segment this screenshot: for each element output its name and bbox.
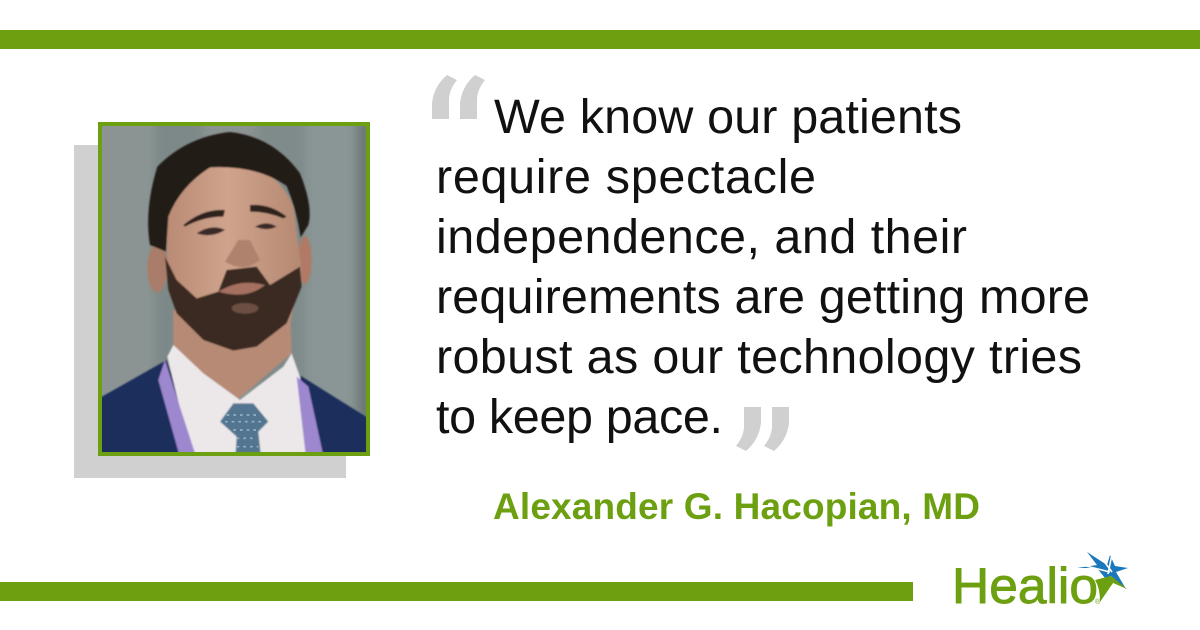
quote text: requirements are getting more — [436, 270, 1090, 324]
chin — [232, 303, 258, 314]
Healio logo — [952, 552, 1128, 614]
neck — [173, 310, 292, 400]
logo star — [1077, 552, 1128, 602]
logo wordmark: Healio — [952, 558, 1098, 614]
eyes — [197, 227, 225, 235]
tie — [220, 403, 268, 463]
closing quotation mark — [736, 407, 789, 451]
opening quotation mark — [432, 75, 485, 119]
registered mark: ® — [1095, 598, 1101, 606]
nose shadow — [225, 240, 260, 267]
lips — [218, 283, 265, 295]
quote text: independence, and their — [436, 210, 967, 264]
photo drop shadow panel — [74, 145, 346, 478]
quote text: robust as our technology tries — [436, 330, 1082, 384]
portrait photo with green frame — [98, 122, 370, 456]
ears — [147, 244, 167, 292]
attribution name: Alexander G. Hacopian, MD — [493, 486, 980, 527]
eyebrows — [183, 210, 225, 227]
suit — [90, 360, 203, 463]
lanyard — [157, 360, 196, 452]
quote text: require spectacle — [436, 150, 816, 204]
top green bar — [0, 30, 1200, 49]
hair — [148, 132, 310, 252]
face — [166, 166, 302, 320]
shirt — [166, 344, 306, 452]
quote text: to keep pace. — [436, 390, 723, 444]
quote text: We know our patients — [494, 90, 962, 144]
tie pattern — [225, 415, 263, 447]
beard — [165, 257, 302, 351]
bottom green bar — [0, 582, 913, 601]
